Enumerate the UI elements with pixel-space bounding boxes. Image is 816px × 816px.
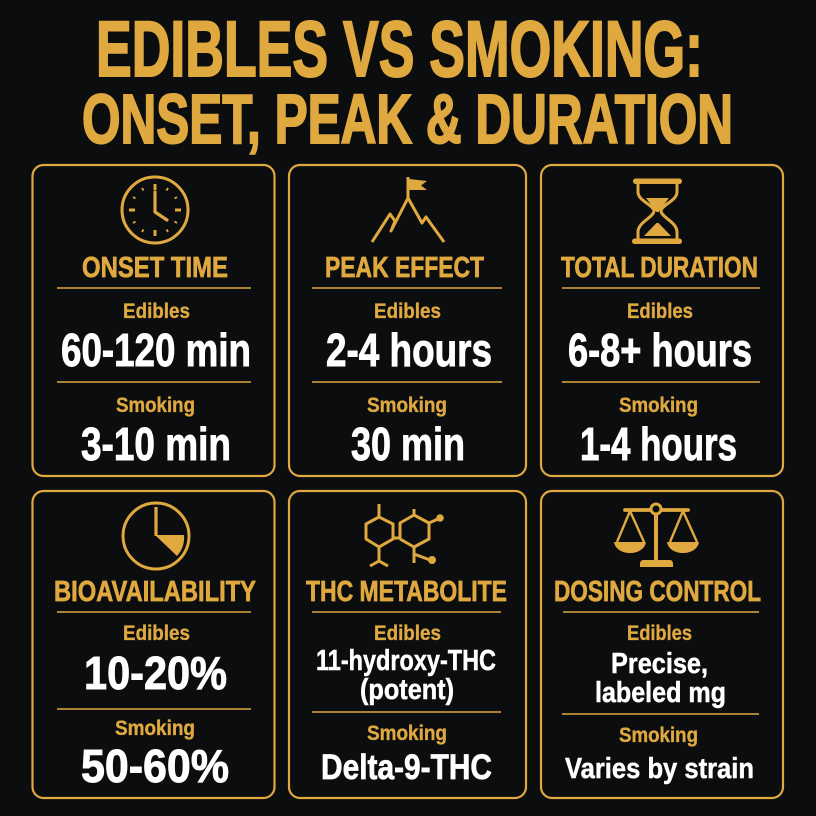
panel: thc metabolite: (potent) (360, 674, 454, 706)
edibles value: 6-8+ hours (568, 324, 752, 376)
edibles value: 11-hydroxy-THC (316, 645, 496, 677)
smoking value: 1-4 hours (580, 418, 737, 470)
smoking label: Smoking (619, 723, 698, 747)
heading: onset time: ONSET TIME (82, 252, 228, 284)
icon: mountain with flag (372, 177, 444, 242)
panel: bioavailability (32, 491, 274, 798)
panel: total duration (541, 165, 783, 476)
edibles value: Precise, (611, 648, 708, 680)
panel: peak effect (289, 165, 526, 476)
heading: dosing control: DOSING CONTROL (554, 576, 761, 608)
smoking label: Smoking (116, 393, 195, 417)
panel: thc metabolite (289, 491, 526, 798)
heading: total duration: TOTAL DURATION (561, 252, 758, 284)
smoking value: 50-60% (81, 740, 229, 792)
smoking label: Smoking (115, 716, 195, 740)
edibles label: Edibles (374, 299, 441, 323)
icon: balance scale (614, 504, 699, 567)
icon: molecule (366, 504, 444, 566)
edibles value: 2-4 hours (326, 324, 492, 376)
edibles label: Edibles (374, 621, 441, 645)
icon: pie chart (123, 503, 189, 569)
edibles label: Edibles (123, 299, 190, 323)
heading: bioavailability: BIOAVAILABILITY (54, 576, 256, 608)
panel: dosing control: labeled mg (595, 677, 726, 709)
smoking label: Smoking (619, 393, 698, 417)
edibles value: 10-20% (84, 647, 227, 699)
smoking value: Varies by strain (565, 753, 754, 785)
smoking value: 3-10 min (81, 418, 231, 470)
title (82, 4, 733, 158)
smoking label: Smoking (367, 721, 447, 745)
edibles value: 60-120 min (61, 324, 251, 376)
panel: onset time (32, 165, 274, 476)
edibles label: Edibles (627, 299, 693, 323)
smoking value: 30 min (351, 418, 465, 470)
panel: dosing control (541, 491, 783, 798)
icon: hourglass (632, 178, 682, 244)
edibles label: Edibles (627, 621, 692, 645)
smoking value: Delta-9-THC (321, 748, 492, 787)
edibles label: Edibles (123, 621, 190, 645)
heading: thc metabolite: THC METABOLITE (306, 576, 507, 608)
icon: clock (122, 177, 188, 243)
smoking label: Smoking (367, 393, 447, 417)
heading: peak effect: PEAK EFFECT (325, 252, 484, 284)
